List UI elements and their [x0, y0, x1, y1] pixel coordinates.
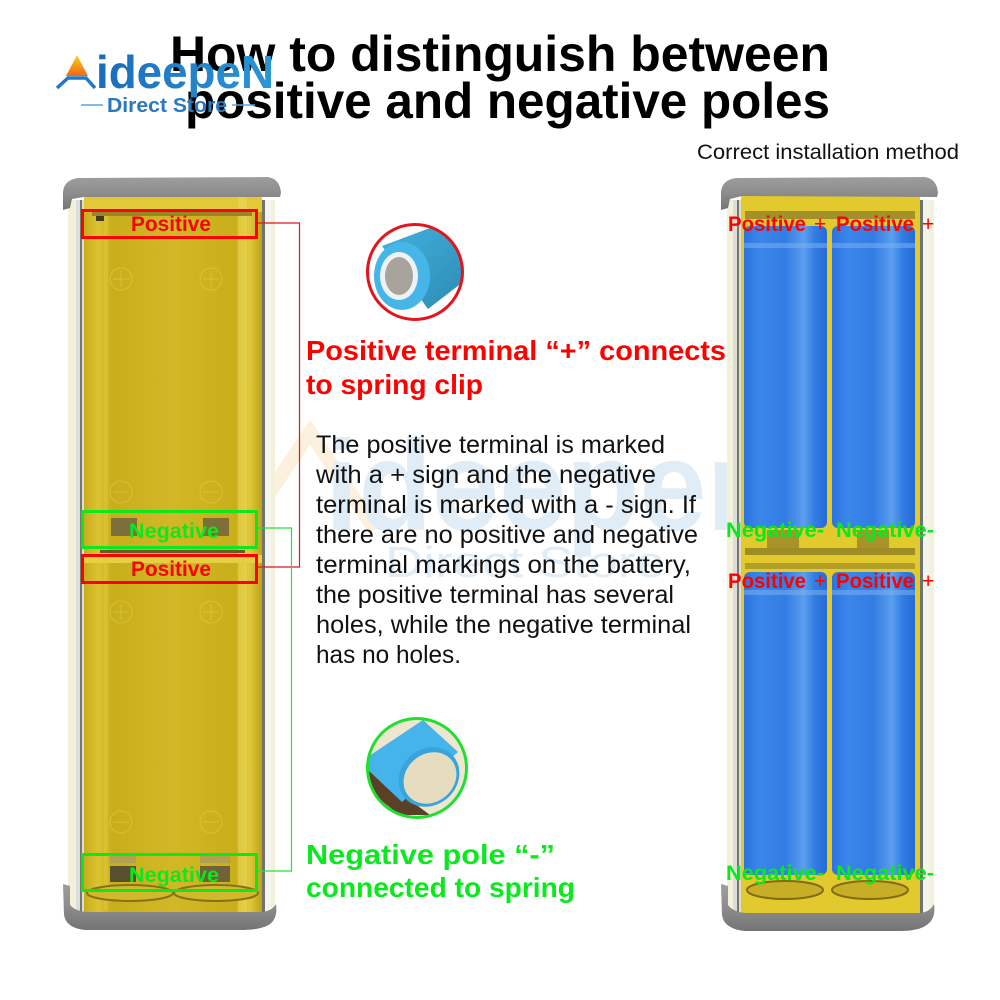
explanation paragraph: terminal markings on the battery, [316, 551, 691, 579]
explanation paragraph: holes, while the negative terminal [316, 611, 691, 639]
right negative labels bottom: Negative- [836, 862, 934, 885]
contacts [92, 212, 252, 216]
negative terminal photo [366, 718, 472, 819]
positive terminal heading: Positive terminal “+” connects [306, 335, 726, 366]
right negative labels middle: Negative- [726, 519, 824, 542]
negative callout box middle: Negative [129, 520, 219, 543]
logo wordmark: ideepeN [96, 46, 274, 98]
right negative labels middle: Negative- [836, 519, 934, 542]
right battery holder [721, 177, 938, 931]
positive callout box middle: Positive [131, 558, 211, 581]
explanation paragraph: there are no positive and negative [316, 521, 698, 549]
red connector line [258, 223, 300, 567]
left battery holder [63, 177, 281, 930]
positive terminal heading [306, 335, 726, 400]
negative pole heading: Negative pole “-” [306, 839, 555, 870]
right positive labels top: + [922, 213, 934, 236]
negative callout box middle [82, 512, 256, 548]
right positive labels top: Positive [728, 213, 806, 236]
right positive labels lower [728, 570, 934, 593]
right positive labels lower: Positive [728, 570, 806, 593]
holder shell [68, 200, 275, 912]
negative pole heading: connected to spring [306, 872, 575, 903]
right positive labels lower: + [922, 570, 934, 593]
embossed polarity marks [110, 268, 222, 833]
negative callout box bottom [82, 854, 256, 890]
watermark logo [245, 415, 780, 587]
watermark logo: ideepen [325, 415, 780, 558]
logo [57, 46, 274, 117]
positive callout box middle [82, 556, 256, 582]
right positive labels top: + [814, 213, 826, 236]
right negative labels bottom: Negative- [726, 862, 824, 885]
explanation paragraph: with a + sign and the negative [315, 461, 656, 489]
yellow interior [84, 196, 262, 912]
negative pole heading [306, 839, 575, 903]
logo triangle [66, 55, 88, 76]
positive callout box top [82, 210, 256, 238]
positive terminal photo [368, 224, 463, 320]
bottom cap [721, 884, 934, 931]
title: positive and negative poles [185, 73, 830, 129]
logo tagline: Direct Store [107, 95, 227, 117]
right positive labels lower: Positive [836, 570, 914, 593]
batteries [744, 226, 827, 528]
top cap [63, 177, 281, 210]
bottom cap [63, 884, 276, 930]
watermark logo: Direct Store [385, 538, 665, 587]
explanation paragraph: The positive terminal is marked [316, 431, 665, 459]
right positive labels top: Positive [836, 213, 914, 236]
positive terminal heading: to spring clip [306, 369, 483, 400]
title: How to distinguish between [170, 26, 830, 82]
negative callout box bottom: Negative [129, 864, 219, 887]
title [170, 26, 830, 129]
caption: correct installation method: Correct installation method [697, 141, 959, 164]
top cap [721, 177, 938, 210]
explanation paragraph: has no holes. [316, 641, 461, 669]
yellow interior [741, 196, 920, 913]
battery highlights [744, 243, 915, 595]
explanation paragraph: terminal is marked with a - sign. If [316, 491, 696, 519]
right positive labels lower: + [814, 570, 826, 593]
holder shell [727, 200, 934, 913]
explanation paragraph: the positive terminal has several [316, 581, 674, 609]
right positive labels top [728, 213, 934, 236]
green connector line [258, 528, 292, 871]
positive callout box top: Positive [131, 213, 211, 236]
right negative labels middle [726, 519, 934, 542]
explanation paragraph [315, 431, 698, 669]
right negative labels bottom [726, 862, 934, 885]
